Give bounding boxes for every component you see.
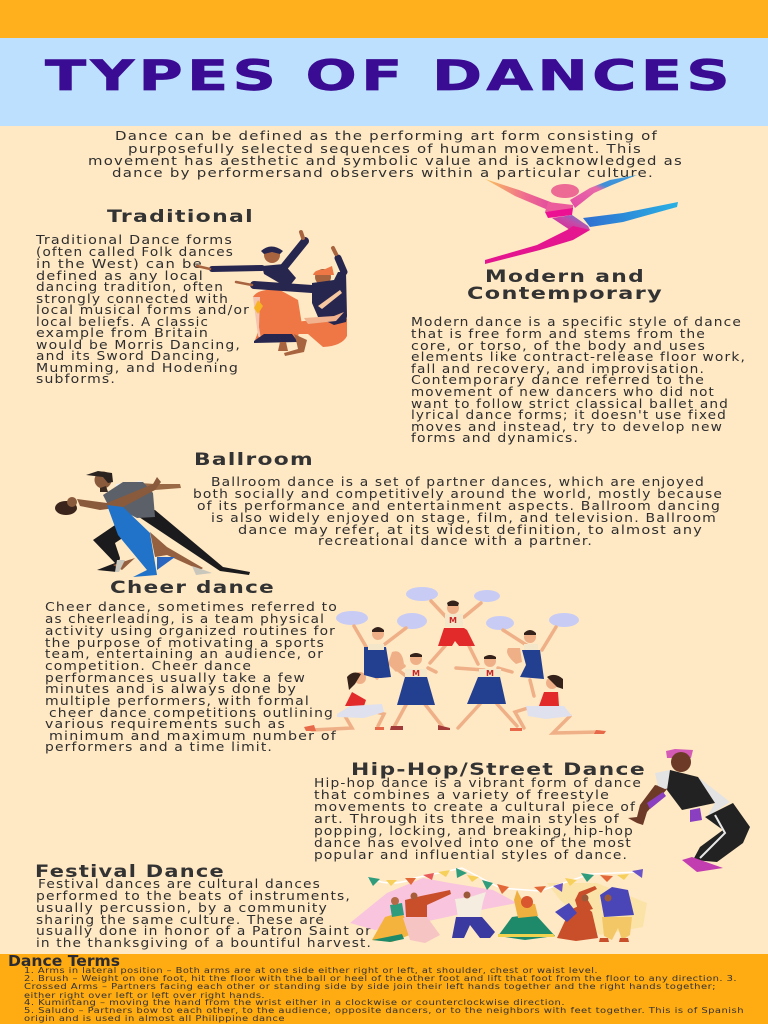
text: cheer dance: various requirements such as bbox=[45, 717, 286, 731]
dancer 5 bbox=[555, 886, 598, 941]
text: modern bbox=[411, 315, 746, 445]
text: traditional: Traditional Dance forms bbox=[35, 233, 233, 247]
illustration: cheerleaders bbox=[304, 587, 606, 734]
text: traditional: strongly connected with bbox=[36, 292, 229, 306]
text: hip-hop: that combines a variety of freestyle bbox=[314, 788, 610, 802]
text: ballroom: of its performance and entertainment aspects. Ballroom dancing bbox=[197, 499, 721, 513]
text: festival dance: sharing the same culture. These are bbox=[36, 913, 325, 927]
heading: hip-hop: Hip-Hop/Street Dance bbox=[351, 760, 646, 779]
heading: traditional: Traditional bbox=[107, 207, 254, 226]
text: cheer dance: multiple performers, with formal bbox=[45, 694, 310, 708]
dancer 4 bbox=[498, 890, 555, 940]
text: traditional: defined as any local bbox=[36, 269, 204, 283]
intro text bbox=[88, 129, 683, 180]
text: modern: forms and dynamics. bbox=[411, 431, 579, 445]
text: festival dance bbox=[36, 877, 372, 950]
illustration: festival dancers bbox=[350, 868, 647, 943]
text: traditional: dancing tradition, often bbox=[36, 280, 224, 294]
text: cheer dance: activity using organized routines for bbox=[45, 624, 336, 638]
illustration: cheerleaders: M bbox=[412, 669, 420, 678]
dancer 2 bbox=[403, 890, 451, 943]
text: hip-hop: popular and influential styles of dance. bbox=[314, 848, 628, 862]
text: modern: want to follow strict classical ballet and bbox=[411, 397, 729, 411]
text: modern: Contemporary dance referred to the bbox=[411, 373, 705, 387]
text: cheer dance: minutes and is always done by bbox=[45, 682, 297, 696]
heading: modern and contemporary: Modern and bbox=[485, 267, 645, 286]
panel: dance terms bbox=[0, 952, 768, 1024]
text: modern: core, or torso, of the body and uses bbox=[411, 339, 706, 353]
text: dance terms: either right over left or left over right hands. bbox=[24, 991, 265, 1000]
text: hip-hop: dance has evolved into one of the most bbox=[314, 836, 632, 850]
text: ballroom: dance may refer, at its widest definition, to almost any bbox=[238, 523, 703, 537]
panel: ballroom bbox=[55, 450, 723, 577]
heading: festival dance: Festival Dance bbox=[35, 862, 225, 881]
text: dance terms bbox=[24, 966, 744, 1023]
title: TYPES OF DANCES bbox=[45, 51, 734, 100]
dancer 3 bbox=[452, 892, 495, 938]
text: cheer dance: team, entertaining an audience, or bbox=[45, 647, 324, 661]
text: cheer dance: as cheerleading, is a team physical bbox=[45, 612, 325, 626]
text: hip-hop: Hip-hop dance is a vibrant form of dance bbox=[314, 776, 642, 790]
heading: modern and contemporary: Contemporary bbox=[467, 284, 663, 303]
heading: cheer dance: Cheer dance bbox=[110, 578, 275, 597]
text: traditional: local beliefs. A classic bbox=[36, 315, 209, 329]
illustration: traditional dancers bbox=[197, 232, 347, 356]
text: hip-hop: movements to create a cultural piece of bbox=[314, 800, 636, 814]
text: dance terms: 4. Kumintang – moving the hand from the wrist either in a clockwise or counterclockwise direction. bbox=[24, 998, 565, 1007]
text: hip-hop bbox=[314, 776, 642, 862]
intro text: Dance can be defined as the performing art form consisting of bbox=[115, 129, 658, 143]
text: festival dance: usually percussion, by a community bbox=[36, 901, 328, 915]
text: ballroom bbox=[193, 475, 723, 548]
text: cheer dance: performances usually take a few bbox=[45, 671, 306, 685]
text: dance terms: Crossed Arms – Partners facing each other or standing side by side join their left hands together and the right hands together; bbox=[24, 982, 716, 991]
text: modern: fall and recovery, and improvisation. bbox=[411, 362, 705, 376]
text: hip-hop: art. Through its three main styles of bbox=[314, 812, 620, 826]
text: ballroom: both socially and competitively around the world, mostly because bbox=[193, 487, 723, 501]
header band bbox=[0, 38, 768, 126]
intro text: purposefully selected sequences of human movement. This bbox=[128, 142, 642, 156]
text: traditional: Mumming, and Hodening bbox=[36, 361, 239, 375]
text: traditional: (often called Folk dances bbox=[36, 245, 234, 259]
dancer 1 bbox=[372, 897, 412, 942]
text: traditional: and its Sword Dancing, bbox=[36, 349, 221, 363]
illustration: cheerleaders: M bbox=[486, 669, 494, 678]
illustration: cheerleaders: M bbox=[449, 616, 457, 625]
text: modern: elements like contract-release floor work, bbox=[411, 350, 746, 364]
text: traditional: subforms. bbox=[36, 372, 116, 386]
text: dance terms: 1. Arms in lateral position – Both arms are at one side either right or left, at shoulder, chest or waist level. bbox=[24, 966, 598, 975]
text: ballroom: is also widely enjoyed on stage, film, and television. Ballroom bbox=[211, 511, 717, 525]
dancer 6 bbox=[599, 887, 634, 942]
panel: hip-hop bbox=[314, 749, 750, 872]
top orange band bbox=[0, 0, 768, 38]
illustration: hip-hop dancer bbox=[628, 749, 750, 872]
text: modern: that is free form and stems from the bbox=[411, 327, 706, 341]
text: dance terms: 2. Brush – Weight on one foot, hit the floor with the ball or heel of the other foot and lift that foot from the floor to any direction. 3. bbox=[24, 974, 737, 983]
text: traditional: in the West) can be bbox=[36, 257, 203, 271]
text: traditional: would be Morris Dancing, bbox=[36, 338, 241, 352]
text: festival dance: performed to the beats of instruments, bbox=[36, 889, 351, 903]
heading: ballroom: Ballroom bbox=[194, 450, 314, 469]
text: dance terms: origin and is used in almost all Philippine dance bbox=[24, 1014, 285, 1023]
text: cheer dance: cheer dance competitions outlining bbox=[49, 706, 334, 720]
illustration: ballroom couple bbox=[55, 471, 250, 577]
text: ballroom: recreational dance with a partner. bbox=[318, 534, 593, 548]
intro text: movement has aesthetic and symbolic value and is acknowledged as bbox=[88, 154, 683, 168]
panel: modern and contemporary bbox=[411, 267, 746, 445]
text: traditional: example from Britain bbox=[36, 326, 209, 340]
text: traditional: local musical forms and/or bbox=[36, 303, 250, 317]
text: traditional bbox=[35, 233, 250, 386]
heading: dance terms: Dance Terms bbox=[8, 952, 120, 970]
text: dance terms: 5. Saludo – Partners bow to each other, to the audience, opposite dancers, or to the neighbors with feet together. This is of Spanish bbox=[24, 1006, 744, 1015]
text: cheer dance: the purpose of motivating a sports bbox=[45, 636, 325, 650]
text: cheer dance bbox=[45, 600, 338, 754]
text: modern: Modern dance is a specific style of dance bbox=[411, 315, 742, 329]
text: festival dance: in the thanksgiving of a bountiful harvest. bbox=[36, 936, 372, 950]
intro text: dance by performersand observers within a particular culture. bbox=[112, 166, 654, 180]
text: modern: movement of new dancers who did not bbox=[411, 385, 715, 399]
text: modern: moves and instead, try to develop new bbox=[411, 420, 723, 434]
text: festival dance: usually done in honor of a Patron Saint or bbox=[36, 924, 372, 938]
panel: cheer dance bbox=[45, 578, 606, 754]
text: hip-hop: popping, locking, and breaking, hip-hop bbox=[314, 824, 634, 838]
panel: festival dance bbox=[35, 862, 647, 950]
heading: modern and contemporary bbox=[467, 267, 663, 303]
text: cheer dance: Cheer dance, sometimes referred to bbox=[45, 600, 338, 614]
text: cheer dance: minimum and maximum number of bbox=[49, 729, 337, 743]
text: cheer dance: competition. Cheer dance bbox=[45, 659, 252, 673]
text: modern: lyrical dance forms; it doesn't use fixed bbox=[411, 408, 727, 422]
illustration: ballet dancer bbox=[485, 175, 678, 264]
text: cheer dance: performers and a time limit. bbox=[45, 740, 273, 754]
text: ballroom: Ballroom dance is a set of partner dances, which are enjoyed bbox=[211, 475, 705, 489]
text: festival dance: Festival dances are cultural dances bbox=[38, 877, 321, 891]
